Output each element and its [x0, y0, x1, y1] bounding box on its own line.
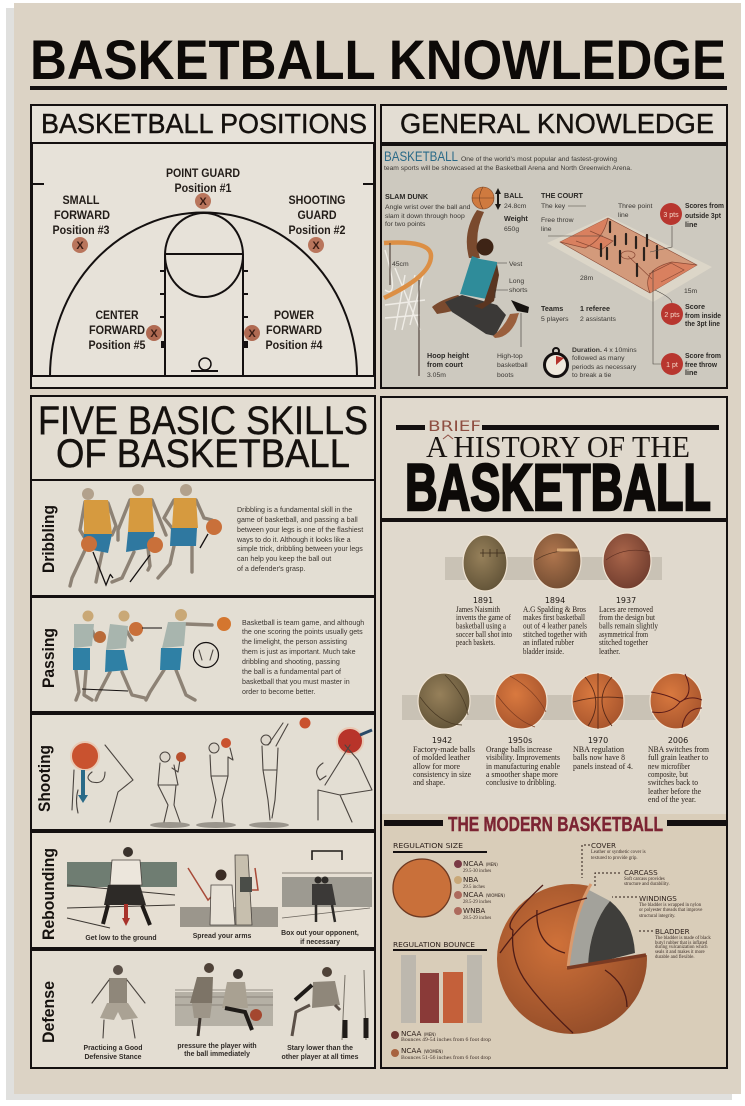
panel: shooting [31, 714, 375, 830]
badge: 1 pt: free throw [685, 360, 717, 369]
description: order to become better. [242, 688, 315, 696]
regulation bounce [391, 940, 492, 1061]
position: shooting guard: SHOOTING [288, 193, 346, 207]
position: small forward [52, 193, 110, 253]
labels: CARCASS [624, 868, 658, 877]
description: the limelight, the person assisting [242, 638, 347, 646]
court labels: 2 assistants [580, 316, 616, 323]
captions: Defensive Stance [84, 1054, 142, 1061]
captions: Box out your opponent, [281, 930, 359, 937]
labels: structural integrity. [639, 914, 675, 919]
intro text [384, 148, 632, 172]
panel: defense [31, 950, 375, 1068]
panel: modern basketball [382, 814, 726, 1067]
regulation size [393, 841, 505, 921]
panel: rebounding [31, 832, 375, 948]
duration text [572, 347, 637, 379]
badge: 1 pt: 1 pt [666, 362, 678, 369]
regulation size: 29.5 inches [463, 885, 485, 890]
labels: Leather or synthetic cover is [591, 850, 646, 855]
ball 1894: out of 4 leather panels [523, 620, 588, 630]
shooter 2 [209, 738, 233, 822]
heading: a history of the: A HISTORY OF THE [426, 429, 690, 464]
position: power forward: POWER [274, 308, 314, 322]
ball 1950s: visibility. Improvements [486, 752, 561, 762]
description: ways to do it. Although it looks like a [236, 536, 351, 544]
figure 2 [96, 610, 145, 700]
ball 1942: allow for more [413, 761, 460, 771]
movement arrows [82, 628, 162, 691]
ball 1970: NBA regulation [573, 744, 625, 754]
labels: The bladder is wrapped in nylon [639, 903, 702, 908]
position: center forward: FORWARD [89, 323, 145, 337]
stopwatch [544, 348, 568, 376]
ball 1942 [413, 673, 476, 787]
position: center forward: X [150, 328, 158, 340]
callouts: dunk: 45cm [392, 261, 409, 268]
ball 1894: bladder inside. [523, 646, 564, 656]
ball 1894: A.G Spalding & Bros [523, 604, 587, 614]
position: point guard: POINT GUARD [166, 166, 240, 180]
ball 1950s: 1950s [508, 736, 532, 745]
ball 1950s [486, 673, 561, 787]
ball 1937: leather. [599, 646, 620, 656]
infographic background [382, 146, 726, 387]
ball 1942: and shape. [413, 777, 445, 787]
shooter 3 [261, 718, 310, 820]
duration text: periods as necessary [572, 364, 637, 371]
ball 1894: stitched together with [523, 629, 588, 639]
labels: textured to provide grip. [591, 856, 638, 861]
arrow: ball size [495, 188, 501, 210]
position: center forward [88, 308, 162, 352]
ball 1891 [456, 535, 512, 647]
captions: Stary lower than the [287, 1045, 353, 1052]
position: shooting guard: Position #2 [288, 223, 346, 237]
description: game of basketball, and passing a ball [237, 516, 358, 524]
figure 1 [70, 488, 116, 586]
regulation bounce: NCAA (MEN) [401, 1029, 436, 1038]
captions: Spread your arms [193, 933, 251, 940]
ball 2006: composite, but [648, 769, 688, 779]
description: can help you keep the ball out [237, 555, 331, 563]
position: point guard: X [199, 196, 207, 208]
callouts: dunk: slam it down through hoop [385, 213, 465, 220]
court labels: Free throw [541, 217, 574, 224]
ball 1937: balls remain slightly [599, 620, 659, 630]
ball 2006: switches back to [648, 777, 698, 787]
description: basketball that you must master in [242, 678, 350, 686]
ball 2006: full grain leather to [648, 752, 708, 762]
court labels: Three point [618, 203, 652, 210]
ball 1937: asymmetrical from [599, 629, 648, 639]
label: Shooting [35, 745, 54, 812]
ball 1891: peach baskets. [456, 637, 495, 647]
panel: five basic skills heading: FIVE BASIC SKILLS [38, 399, 368, 443]
ball 1891: James Naismith [456, 604, 501, 614]
captions: if necessary [300, 939, 340, 946]
shadows [150, 822, 289, 828]
label: Dribbling [39, 505, 58, 573]
regulation size: REGULATION SIZE [393, 841, 463, 850]
callouts: dunk: 24.8cm [504, 203, 527, 210]
callouts: dunk: 3.05m [427, 372, 446, 379]
panel: ball timeline [402, 533, 709, 804]
labels: The bladder is made of black [655, 936, 711, 941]
callouts: dunk: 650g [504, 226, 519, 233]
court labels: line [541, 226, 552, 233]
badge: 1 pt: line [685, 368, 697, 377]
label: Passing [39, 628, 58, 688]
ball 1942: 1942 [432, 736, 452, 745]
ball 1891: basketball using a [456, 620, 506, 630]
labels: butyl rubber that is inflated [655, 941, 708, 946]
regulation bounce: NCAA (WOMEN) [401, 1046, 443, 1055]
callouts: dunk: from court [427, 360, 464, 369]
badge: 2 pts: Score [685, 302, 705, 311]
description: the ball is a fundamental part of [242, 668, 341, 676]
captions: pressure the player with [177, 1043, 257, 1050]
court labels: 1 referee [580, 304, 610, 313]
ball 1950s: conclusive to dribbling. [486, 777, 556, 787]
ball 1937: 1937 [616, 596, 636, 605]
annotation: brief: BRIEF [428, 419, 481, 435]
cutaway ball [497, 880, 660, 1034]
badge: 3 pts: 3 pts [663, 212, 679, 219]
position: power forward: FORWARD [266, 323, 322, 337]
passing figures [73, 609, 231, 700]
regulation bounce: Bounces 49-54 inches from 6 foot drop [401, 1038, 492, 1043]
ball 2006: end of the year. [648, 794, 696, 804]
ball 1891: 1891 [473, 596, 493, 605]
captions [85, 930, 359, 946]
position: point guard: Position #1 [174, 181, 232, 195]
court isometric [547, 216, 712, 302]
position: center forward: Position #5 [88, 338, 146, 352]
ball 2006: 2006 [668, 736, 688, 745]
close-up shooter [71, 742, 133, 822]
regulation size: 28.5-29 inches [463, 916, 491, 921]
labels: seals it and makes it more [655, 950, 705, 955]
panel: passing [31, 597, 375, 712]
defense stance player [92, 965, 145, 1038]
badge: 2 pts [661, 302, 721, 328]
ball [472, 187, 494, 209]
callouts: dunk: Hoop height [427, 351, 470, 360]
ball 1950s: Orange balls increase [486, 744, 552, 754]
captions: Practicing a Good [84, 1045, 142, 1052]
panel: five basic skills heading: OF BASKETBALL [56, 432, 350, 476]
court labels: 5 players [541, 316, 569, 323]
badge: 2 pts: 2 pts [664, 312, 680, 319]
ball 1937 [599, 533, 659, 656]
duration text: followed as many [572, 355, 625, 362]
court labels: Teams [541, 304, 563, 313]
ball 2006: leather before the [648, 786, 701, 796]
court labels: line [618, 212, 629, 219]
badge: 3 pts: line [685, 220, 697, 229]
figure 2 [112, 484, 166, 582]
shadow bands [402, 557, 700, 720]
labels [582, 841, 711, 960]
ball 1970: balls now have 8 [573, 752, 625, 762]
ball 1894: makes first basketball [523, 612, 586, 622]
rebound scene 3 [282, 851, 372, 922]
description: dribbling and shooting, passing [242, 658, 340, 666]
callouts: dunk [385, 191, 528, 379]
shooting figures [71, 718, 372, 828]
labels: structure and durability. [624, 882, 670, 887]
description: Dribbling is a fundamental skill in the [237, 506, 352, 514]
hands detail [194, 642, 218, 668]
shooter 1 [158, 752, 186, 822]
callouts: dunk: High-top [497, 353, 523, 360]
callouts: dunk: boots [497, 372, 514, 379]
badge: 1 pt: Score from [685, 351, 721, 360]
regulation size: 29.5-30 inches [463, 869, 491, 874]
panel: dribbling [31, 480, 375, 596]
captions: the ball immediately [184, 1051, 250, 1058]
intro text: BASKETBALL [384, 148, 458, 164]
ball 1937: Laces are removed [599, 604, 654, 614]
court labels: The key [541, 203, 566, 210]
figure 1 [73, 610, 106, 700]
ball 1970 [572, 673, 633, 771]
court players [601, 222, 657, 276]
ball 1970: 1970 [588, 736, 608, 745]
heading: general knowledge: GENERAL KNOWLEDGE [400, 108, 714, 139]
labels: BLADDER [655, 927, 690, 936]
intro text: One of the world's most popular and fastest-growing [461, 156, 617, 163]
hoop [384, 243, 431, 376]
position: small forward: FORWARD [54, 208, 110, 222]
labels: or polyester threads that improve [639, 908, 702, 913]
ball 1950s: a smoother shape more [486, 769, 558, 779]
labels: COVER [591, 841, 616, 850]
description: of a defender's grasp. [237, 565, 305, 573]
captions: Get low to the ground [85, 935, 157, 942]
heading: basketball positions: BASKETBALL POSITIONS [41, 108, 367, 139]
description [242, 619, 364, 696]
description: the one scoring the points usually gets [242, 628, 363, 636]
captions: other player at all times [282, 1054, 359, 1061]
position: shooting guard: X [312, 240, 320, 252]
panel: basketball positions [31, 105, 375, 388]
callouts: dunk: SLAM DUNK [385, 192, 429, 201]
ball 1950s: in manufacturing enable [486, 761, 560, 771]
ball 1942: of molded leather [413, 752, 470, 762]
description: them is just as important. Much take [242, 648, 356, 656]
callouts: dunk: Weight [504, 214, 528, 223]
labels: Soft carcass provides [624, 877, 665, 882]
court diagram [32, 143, 374, 376]
ball 1937: from the design but [599, 612, 656, 622]
ball 1942: consistency in size [413, 769, 471, 779]
regulation size: NBA [463, 875, 478, 884]
court labels: 28m [580, 275, 594, 282]
position: center forward: CENTER [96, 308, 139, 322]
badge: 2 pts: the 3pt line [685, 319, 720, 328]
description: simple trick, dribbling between your legs [237, 545, 363, 553]
regulation bounce: Bounces 51-56 inches from 6 foot drop [401, 1056, 492, 1061]
position: shooting guard: GUARD [298, 208, 337, 222]
callouts: dunk: basketball [497, 362, 528, 369]
ball 1970: panels instead of 4. [573, 761, 633, 771]
callouts: dunk: for two points [385, 221, 426, 228]
ball 2006 [648, 673, 709, 804]
duration text: Duration. 4 x 10mins [572, 347, 637, 354]
court labels [541, 191, 698, 364]
badge: 3 pts [660, 201, 724, 229]
regulation size: 28.5-29 inches [463, 900, 491, 905]
callouts: dunk: Angle wrist over the ball and [385, 204, 471, 211]
position: small forward: Position #3 [52, 223, 110, 237]
position: power forward: X [248, 328, 256, 340]
frame redraw [381, 397, 727, 1068]
position: shooting guard [288, 193, 346, 253]
badge: 1 pt [661, 351, 721, 377]
annotation: brief [428, 419, 481, 439]
position: power forward: Position #4 [266, 338, 323, 352]
label: Rebounding [39, 848, 58, 940]
ball 1894: 1894 [545, 596, 565, 605]
ball 1891: invents the game of [456, 612, 511, 622]
ball 2006: new microfiber [648, 761, 690, 771]
court labels: 15m [684, 288, 698, 295]
panel: general knowledge [381, 105, 727, 388]
court labels: THE COURT [541, 191, 584, 200]
position: point guard [166, 166, 240, 209]
figure 3 [158, 484, 222, 578]
rebound scene 2 [180, 855, 278, 927]
dribbling figures [70, 484, 222, 586]
duration text: to break a tie [572, 372, 612, 379]
description: between your legs is one of the flashiest [237, 526, 363, 534]
ball 1894 [523, 533, 588, 656]
movement arrows [93, 534, 208, 585]
position: power forward [244, 308, 323, 352]
close-up follow through [317, 728, 372, 822]
callouts: dunk: shorts [509, 287, 528, 294]
rebound scene 1 [67, 847, 177, 928]
ball 1894: an inflated rubber [523, 637, 574, 647]
defense pressure scene [175, 963, 273, 1036]
labels: during vulcanization which [655, 945, 708, 950]
captions [84, 1043, 359, 1061]
heading: the modern basketball: THE MODERN BASKETBALL [448, 814, 663, 836]
description: Basketball is team game, and although [242, 619, 364, 627]
ball 2006: NBA switches from [648, 744, 709, 754]
labels: durable and flexible. [655, 955, 695, 960]
callouts: dunk: Vest [509, 261, 522, 268]
intro text: team sports will be showcased at the Basketball Arena and North Greenwich Arena. [384, 165, 632, 172]
ball 1937: stitched together [599, 637, 648, 647]
position: small forward: SMALL [62, 193, 100, 207]
ball 1942: Factory-made balls [413, 744, 476, 754]
callouts: dunk: Long [509, 278, 524, 285]
position: small forward: X [76, 240, 84, 252]
dunking player [432, 210, 529, 338]
panel: history header [381, 397, 727, 1068]
label: Defense [39, 981, 58, 1043]
regulation size: NCAA (WOMEN) [463, 890, 505, 899]
defense low player [292, 967, 366, 1040]
regulation size: WNBA [463, 906, 485, 915]
ball 1891: soccer ball shot into [456, 629, 512, 639]
regulation size: NCAA (MEN) [463, 859, 498, 868]
badge: 3 pts: Scores from [685, 201, 724, 210]
badge: 2 pts: from inside [685, 311, 721, 320]
panel: five basic skills heading [31, 396, 375, 480]
figure 3 [146, 609, 231, 700]
description [236, 506, 363, 573]
callouts: dunk: BALL [504, 191, 524, 200]
badge: 3 pts: outside 3pt [685, 211, 722, 220]
labels: WINDINGS [639, 894, 677, 903]
regulation bounce: REGULATION BOUNCE [393, 940, 475, 949]
